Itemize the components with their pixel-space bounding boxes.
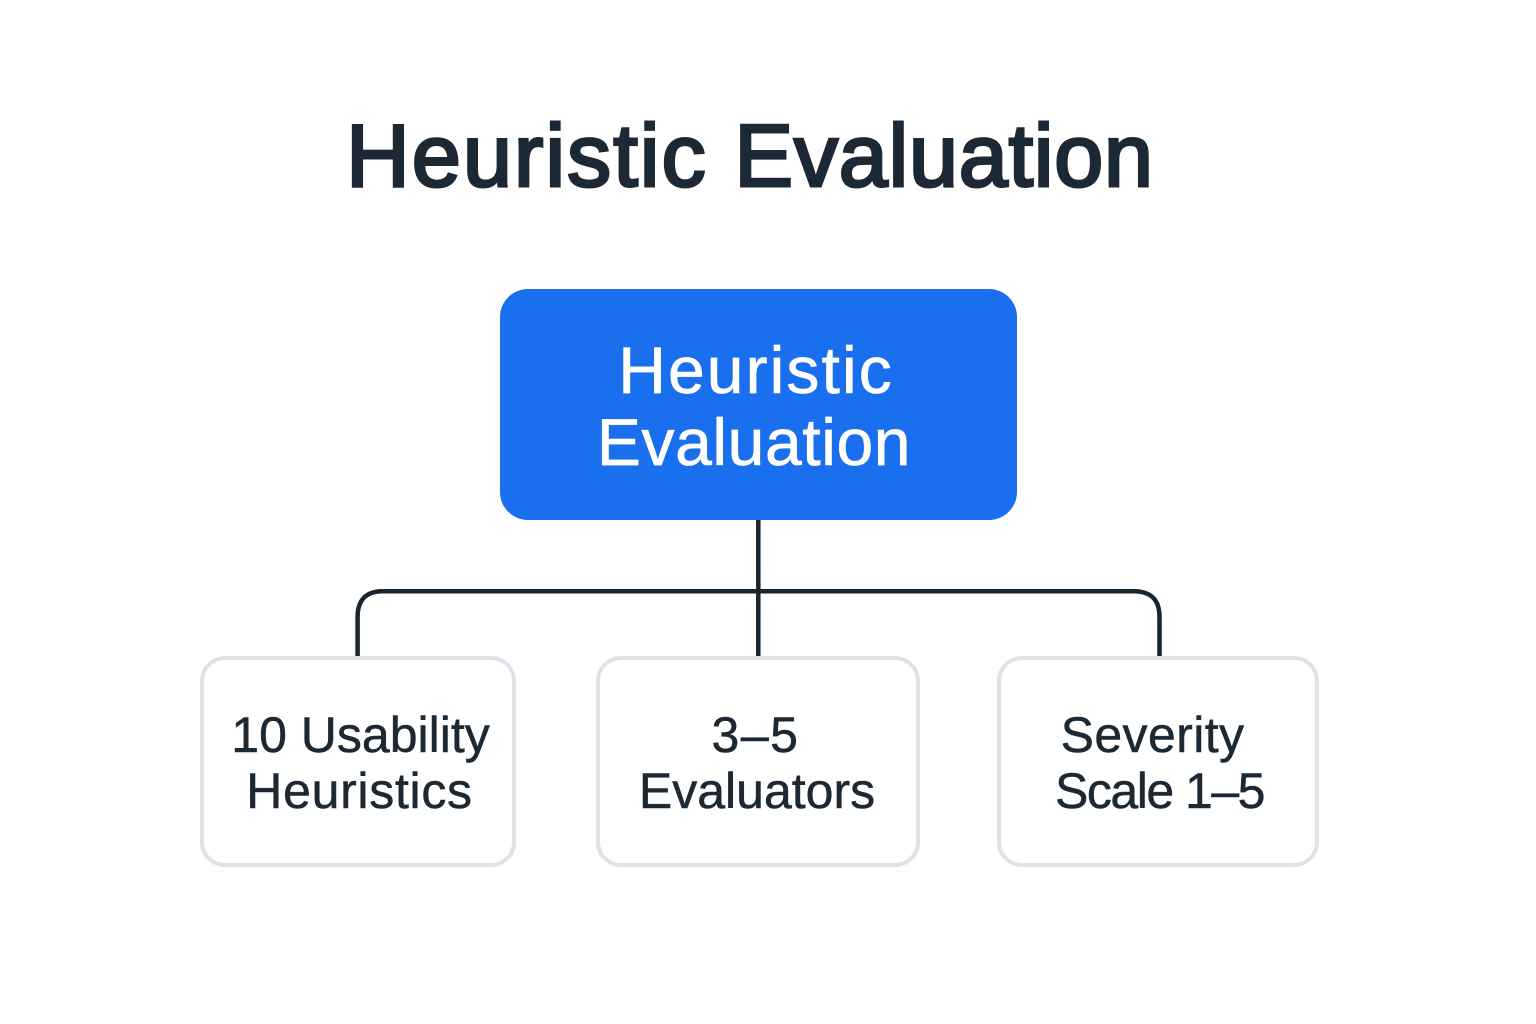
label: usability heuristics: 10 Usability: [231, 707, 490, 763]
label: severity scale: [1055, 707, 1264, 819]
label: severity scale: Severity: [1061, 707, 1244, 763]
title: Heuristic Evaluation: [346, 106, 1154, 205]
box: severity scale: [997, 656, 1319, 867]
main box: [500, 289, 1017, 520]
label: evaluators: 3–5: [712, 707, 799, 763]
box: usability heuristics: [200, 656, 516, 867]
label: evaluators: [639, 707, 875, 819]
label: evaluators: Evaluators: [639, 763, 875, 819]
label: usability heuristics: Heuristics: [246, 763, 473, 819]
label: severity scale: Scale 1–5: [1055, 763, 1264, 819]
main box label: [597, 333, 911, 479]
box: evaluators: [596, 656, 920, 867]
main box label: Evaluation: [597, 405, 911, 479]
main box label: Heuristic: [618, 333, 894, 407]
label: usability heuristics: [231, 707, 490, 819]
